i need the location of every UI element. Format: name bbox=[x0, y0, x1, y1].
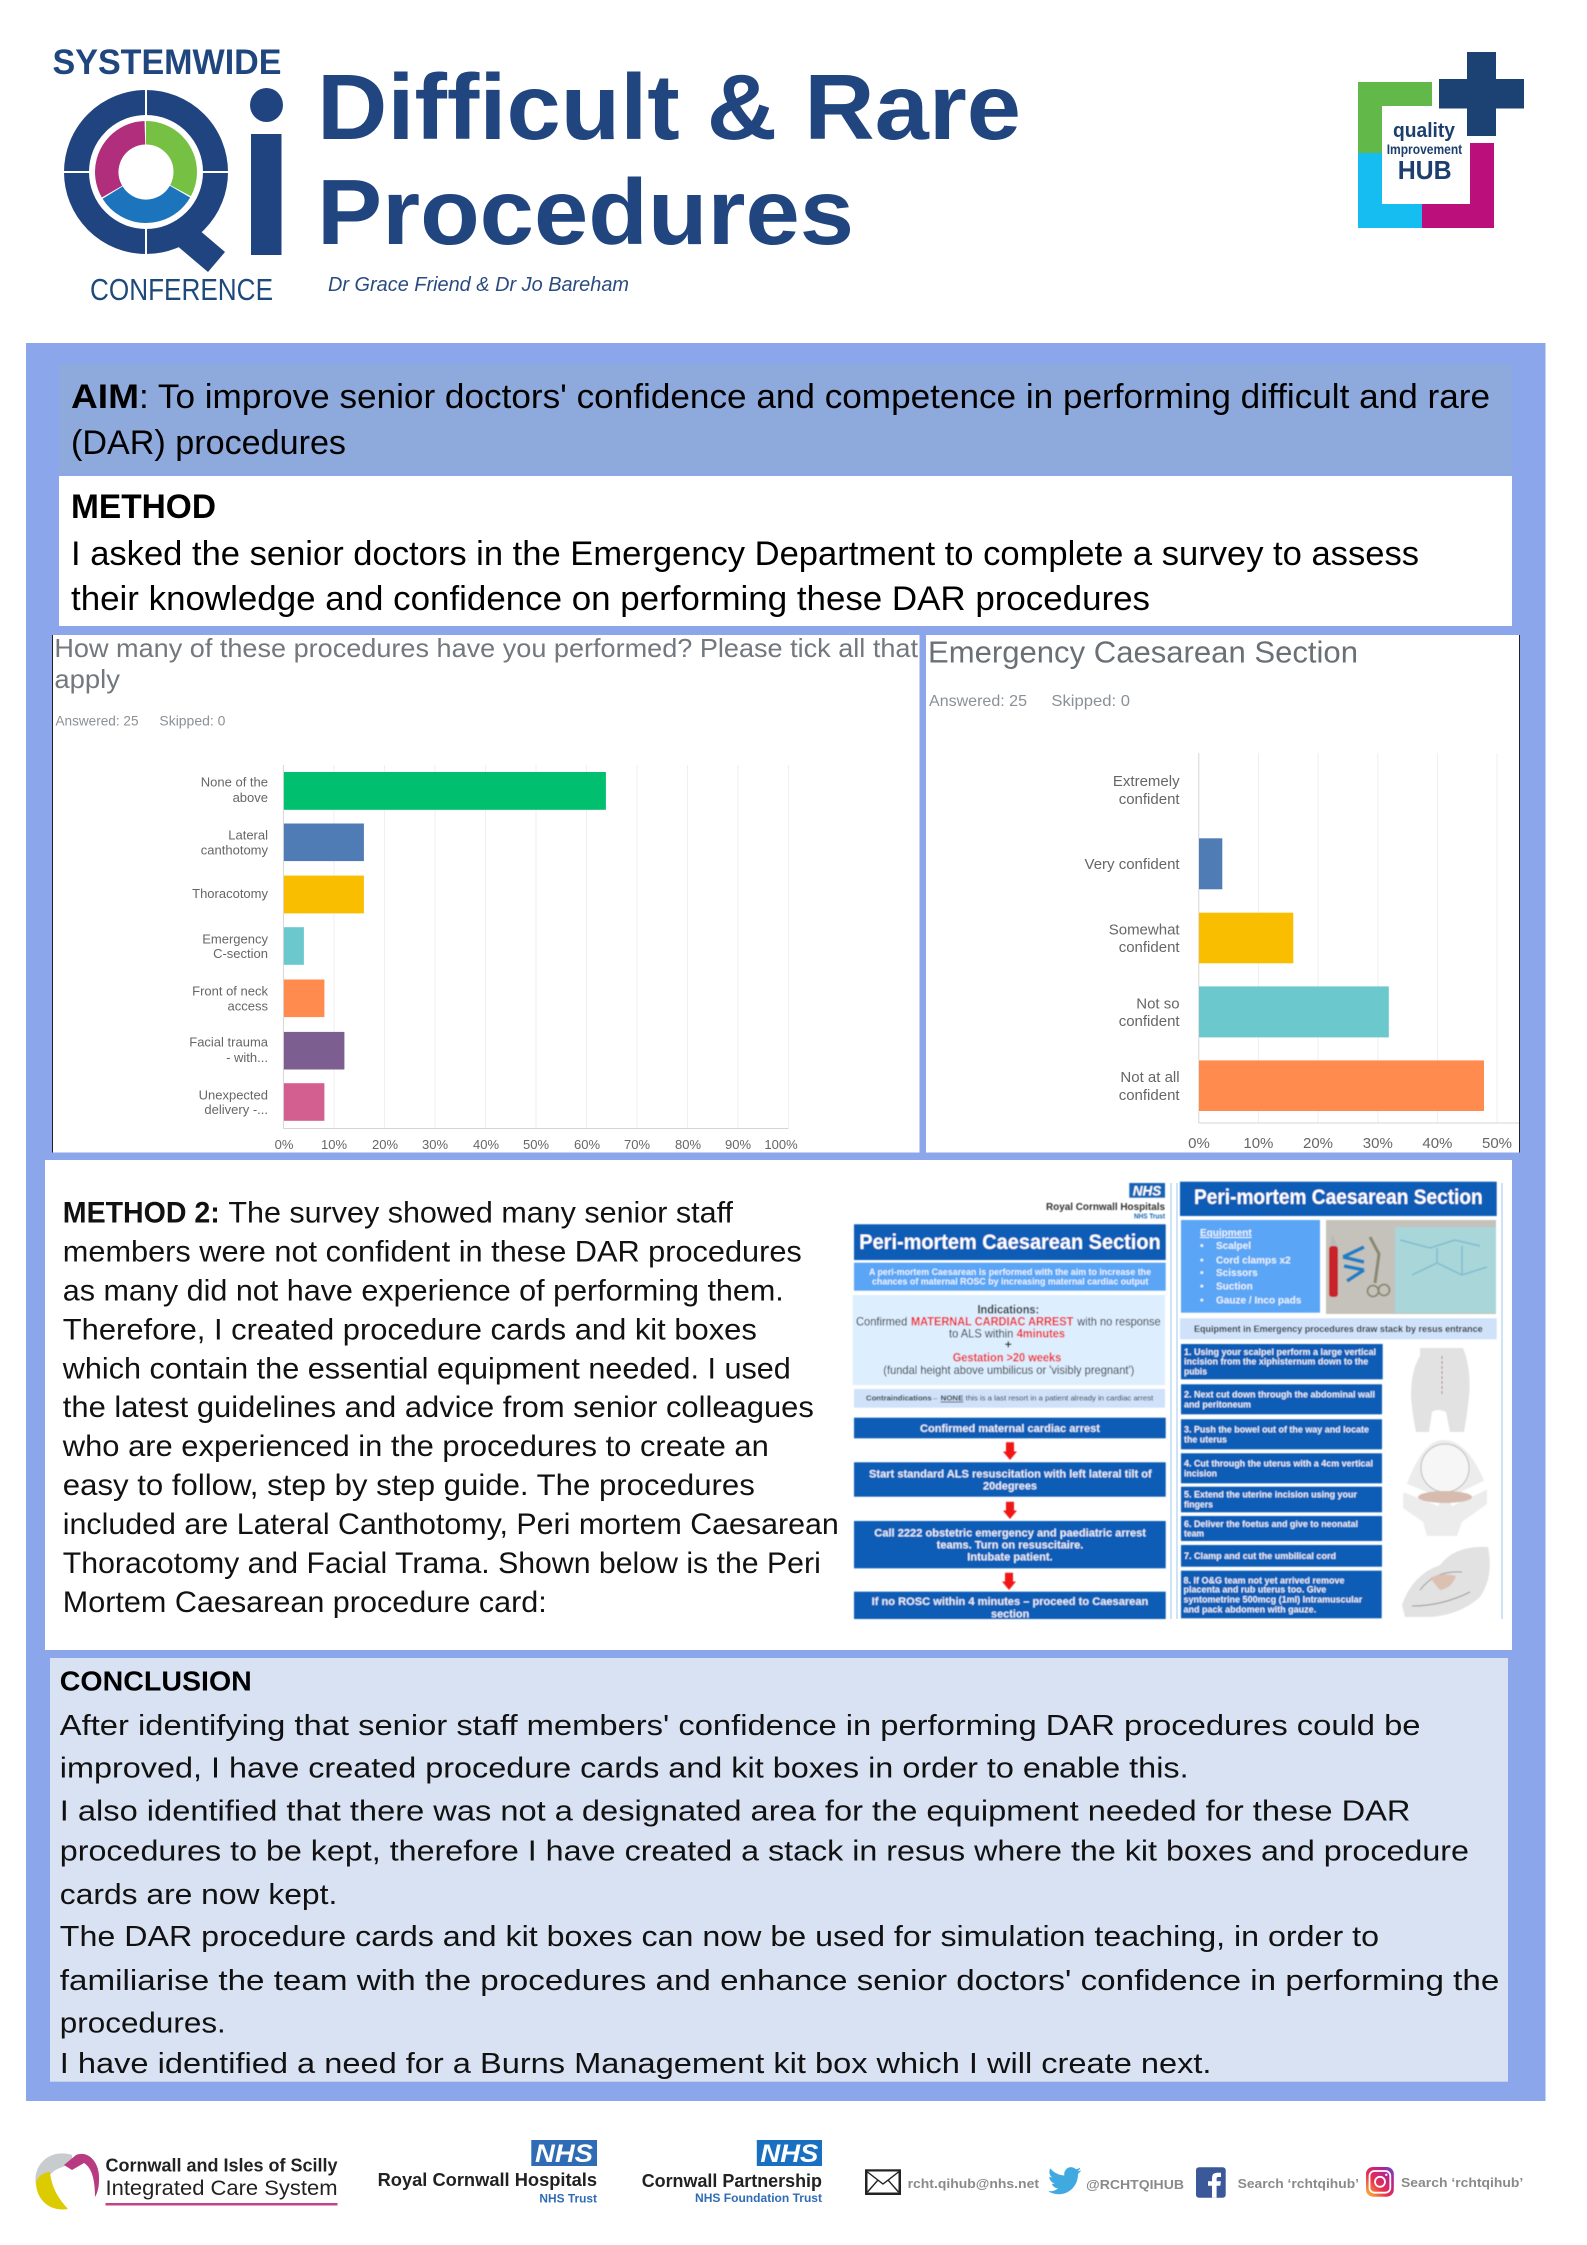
logo: Systemwide QI Conference bbox=[52, 43, 283, 307]
flow step 2: Start standard ALS resuscitation with left lateral tilt of bbox=[869, 1468, 1152, 1480]
card title bbox=[854, 1224, 1166, 1260]
indications box: Gestation >20 weeks bbox=[953, 1351, 1062, 1365]
indications box: + bbox=[1005, 1337, 1012, 1351]
contact: instagram bbox=[1366, 2167, 1523, 2197]
procedure card: front bbox=[853, 1183, 1166, 1620]
icon: instagram bbox=[1366, 2167, 1394, 2197]
logo: Cornwall and Isles of Scilly Integrated Care System bbox=[35, 2153, 338, 2209]
equipment list: • bbox=[1200, 1267, 1204, 1279]
icon: twitter bird bbox=[1048, 2167, 1081, 2194]
trust name bbox=[1046, 1201, 1166, 1221]
logo: quality improvement hub bbox=[1358, 52, 1524, 228]
method 2 text: Mortem Caesarean procedure card: bbox=[63, 1586, 547, 1619]
step 6 bbox=[1181, 1516, 1382, 1541]
card title bbox=[1180, 1182, 1497, 1216]
bar: emergency c-section bbox=[284, 927, 304, 965]
logo: Cornwall Partnership: NHS bbox=[760, 2140, 819, 2168]
category labels: canthotomy bbox=[201, 842, 268, 858]
category labels: Front of neck bbox=[192, 983, 268, 998]
logo: Royal Cornwall Hospitals: NHS bbox=[535, 2140, 593, 2168]
category labels: delivery -... bbox=[204, 1102, 268, 1117]
flow step 4 bbox=[854, 1592, 1166, 1620]
equipment list: • bbox=[1200, 1240, 1204, 1252]
method 2 text: included are Lateral Canthotomy, Peri mortem Caesarean bbox=[63, 1508, 839, 1541]
trust name: NHS Trust bbox=[1134, 1214, 1166, 1221]
method 2 text: the latest guidelines and advice from senior colleagues bbox=[63, 1391, 814, 1424]
step 1: pubis bbox=[1184, 1367, 1207, 1378]
category labels: C-section bbox=[213, 946, 268, 961]
bar chart: confidence bbox=[1085, 753, 1519, 1152]
flow step 3: Call 2222 obstetric emergency and paediatric arrest bbox=[874, 1528, 1146, 1540]
step 1: 1. Using your scalpel perform a large vertical bbox=[1184, 1347, 1376, 1358]
illustration: abdomen incision bbox=[1411, 1348, 1470, 1432]
method 2 text: METHOD 2: bbox=[63, 1197, 220, 1230]
step 4 bbox=[1181, 1453, 1382, 1483]
step 5: 5. Extend the uterine incision using your bbox=[1184, 1490, 1357, 1501]
percent axis labels: 90% bbox=[725, 1137, 751, 1152]
contact: facebook: Search ‘rchtqihub’ bbox=[1238, 2176, 1359, 2191]
chart title bbox=[54, 633, 919, 694]
method 2 text: members were not confident in these DAR procedures bbox=[63, 1236, 802, 1269]
title bbox=[317, 55, 1021, 264]
icon: heart bbox=[35, 2153, 99, 2209]
conclusion text: The DAR procedure cards and kit boxes can now be used for simulation teaching, in order to bbox=[60, 1921, 1379, 1953]
bar: somewhat confident bbox=[1199, 913, 1293, 963]
answered and skipped counts: Answered: 25 bbox=[929, 693, 1027, 710]
bar: thoracotomy bbox=[284, 876, 364, 913]
step 6: team bbox=[1184, 1528, 1204, 1539]
equipment list: Suction bbox=[1216, 1280, 1253, 1292]
step 4: incision bbox=[1184, 1468, 1217, 1479]
step 2: 2. Next cut down through the abdominal wall bbox=[1184, 1390, 1375, 1401]
percent axis labels: 10% bbox=[321, 1137, 347, 1152]
title: Difficult & Rare bbox=[317, 55, 1021, 159]
method text bbox=[71, 535, 1419, 618]
logo: Cornwall Partnership: NHS Foundation Trust bbox=[695, 2191, 822, 2205]
card intro: chances of maternal ROSC by increasing maternal cardiac output bbox=[872, 1276, 1148, 1286]
icon: envelope bbox=[865, 2169, 901, 2195]
percent axis labels: 40% bbox=[473, 1137, 499, 1152]
chart title: How many of these procedures have you performed? Please tick all that bbox=[54, 633, 919, 663]
logo: quality improvement hub: HUB bbox=[1398, 155, 1452, 185]
conclusion text: I have identified a need for a Burns Management kit box which I will create next. bbox=[60, 2048, 1211, 2080]
conclusion heading: CONCLUSION bbox=[60, 1666, 252, 1697]
category labels: confident bbox=[1119, 1087, 1180, 1104]
step 3: 3. Push the bowel out of the way and locate bbox=[1184, 1425, 1369, 1436]
procedure card: back bbox=[1180, 1182, 1497, 1618]
chart title: Emergency Caesarean Section bbox=[928, 635, 1358, 670]
bar: facial trauma bbox=[284, 1032, 344, 1070]
icon: letter i bbox=[250, 88, 283, 255]
step 4: 4. Cut through the uterus with a 4cm vertical bbox=[1184, 1459, 1373, 1470]
answered and skipped counts bbox=[929, 693, 1130, 710]
method 2 text bbox=[62, 1197, 839, 1619]
bar: front of neck access bbox=[284, 980, 324, 1017]
conclusion text: cards are now kept. bbox=[60, 1879, 337, 1911]
category labels: access bbox=[228, 998, 268, 1014]
step 8: syntometrine 500mcg (1ml) Intramuscular bbox=[1184, 1594, 1362, 1605]
logo: quality improvement hub: Improvement bbox=[1387, 142, 1463, 157]
equipment list: • bbox=[1200, 1294, 1204, 1306]
percent axis labels: 40% bbox=[1422, 1135, 1452, 1152]
flow step 4: section bbox=[991, 1608, 1030, 1620]
step 2: and peritoneum bbox=[1184, 1399, 1251, 1410]
step 8: 8. If O&G team not yet arrived remove bbox=[1184, 1576, 1344, 1587]
method 2 text: who are experienced in the procedures to create an bbox=[62, 1430, 769, 1463]
flow step 1 bbox=[854, 1418, 1166, 1438]
bar: none of the above bbox=[284, 772, 606, 810]
category labels: Unexpected bbox=[199, 1087, 268, 1102]
conclusion text: familiarise the team with the procedures and enhance senior doctors' confidence in performing the bbox=[60, 1965, 1499, 1997]
logo text: systemwide: SYSTEMWIDE bbox=[52, 43, 282, 82]
panel: method 2 bbox=[45, 1160, 1512, 1650]
flow step 3: Intubate patient. bbox=[967, 1552, 1053, 1564]
flow step 1: Confirmed maternal cardiac arrest bbox=[920, 1423, 1100, 1435]
bar: unexpected delivery bbox=[284, 1083, 324, 1121]
answered and skipped counts bbox=[56, 713, 225, 728]
logo: Cornwall Partnership bbox=[642, 2140, 822, 2205]
indications box: Confirmed bbox=[856, 1315, 907, 1329]
category labels: Not so bbox=[1136, 995, 1180, 1012]
aim text: (DAR) procedures bbox=[71, 424, 346, 462]
indications box: to ALS within bbox=[949, 1326, 1013, 1340]
logo: Royal Cornwall Hospitals bbox=[378, 2140, 597, 2206]
percent axis labels: 0% bbox=[275, 1137, 294, 1152]
panel: method bbox=[59, 476, 1512, 626]
category labels: above bbox=[233, 790, 268, 805]
category labels: - with... bbox=[226, 1050, 268, 1065]
photo: equipment kit bbox=[1326, 1220, 1496, 1314]
panel: conclusion bbox=[50, 1658, 1508, 2082]
aim text: : To improve senior doctors' confidence and competence in performing difficult and rare bbox=[139, 378, 1490, 416]
percent axis labels bbox=[275, 1137, 798, 1152]
icon: facebook bbox=[1196, 2167, 1226, 2198]
location banner: Equipment in Emergency procedures draw stack by resus entrance bbox=[1194, 1324, 1483, 1335]
icon: NHS logo small: NHS bbox=[1133, 1184, 1161, 1198]
logo: Cornwall Partnership: Cornwall Partnership bbox=[642, 2170, 822, 2191]
answered and skipped counts: Skipped: 0 bbox=[1051, 693, 1130, 710]
percent axis labels: 50% bbox=[1482, 1135, 1512, 1152]
category labels: Extremely bbox=[1113, 773, 1180, 790]
logo: Cornwall and Isles of Scilly Integrated Care System: Integrated Care System bbox=[106, 2177, 338, 2200]
conclusion text: I also identified that there was not a designated area for the equipment needed for these DAR bbox=[60, 1796, 1410, 1828]
contact: instagram: Search ‘rchtqihub’ bbox=[1401, 2175, 1523, 2190]
method text: their knowledge and confidence on performing these DAR procedures bbox=[71, 580, 1150, 618]
equipment list: • bbox=[1200, 1254, 1204, 1266]
chart title: apply bbox=[54, 664, 120, 694]
category labels bbox=[1085, 773, 1180, 1104]
logo: Royal Cornwall Hospitals: Royal Cornwall Hospitals bbox=[378, 2169, 597, 2190]
percent axis labels: 80% bbox=[675, 1137, 701, 1152]
category labels: confident bbox=[1119, 791, 1180, 808]
conclusion text: improved, I have created procedure cards and kit boxes in order to enable this. bbox=[60, 1752, 1189, 1784]
contact: twitter bbox=[1048, 2167, 1184, 2194]
percent axis labels: 20% bbox=[372, 1137, 398, 1152]
indications box: Indications: bbox=[978, 1302, 1039, 1316]
category labels: Very confident bbox=[1085, 856, 1180, 873]
percent axis labels: 70% bbox=[624, 1137, 650, 1152]
category labels: Not at all bbox=[1120, 1069, 1180, 1086]
equipment list: Scissors bbox=[1216, 1267, 1258, 1279]
contact: facebook bbox=[1196, 2167, 1359, 2198]
step 1 bbox=[1181, 1344, 1383, 1379]
conclusion text bbox=[60, 1710, 1499, 2080]
step 8: placenta and rub uterus too. Give bbox=[1184, 1585, 1326, 1596]
step 2 bbox=[1181, 1384, 1382, 1414]
card intro bbox=[854, 1263, 1166, 1291]
step 8 bbox=[1181, 1571, 1382, 1618]
method 2 text: Thoracotomy and Facial Trama. Shown below is the Peri bbox=[63, 1547, 821, 1580]
percent axis labels: 60% bbox=[574, 1137, 600, 1152]
step 3 bbox=[1181, 1419, 1382, 1449]
indications box: 4minutes bbox=[1017, 1326, 1065, 1340]
category labels: Thoracotomy bbox=[192, 886, 268, 901]
flow step 3: teams. Turn on resuscitaire. bbox=[937, 1539, 1083, 1551]
category labels: Somewhat bbox=[1109, 921, 1180, 938]
logo text: conference: CONFERENCE bbox=[90, 272, 273, 307]
indications box: MATERNAL CARDIAC ARREST bbox=[911, 1315, 1074, 1329]
indications box: with no response bbox=[1076, 1315, 1161, 1329]
category labels: None of the bbox=[201, 775, 268, 790]
arrow bbox=[1003, 1502, 1017, 1519]
percent axis labels: 0% bbox=[1188, 1135, 1210, 1152]
conclusion text: After identifying that senior staff members' confidence in performing DAR procedures could be bbox=[60, 1710, 1420, 1742]
equipment list: Gauze / Inco pads bbox=[1216, 1294, 1301, 1306]
bar: not at all confident bbox=[1199, 1060, 1484, 1111]
panel: main blue background bbox=[26, 343, 1546, 2101]
flow step 2: 20degrees bbox=[983, 1480, 1037, 1492]
bar chart: procedures bbox=[189, 765, 798, 1152]
indications box: (fundal height above umbilicus or 'visibly pregnant') bbox=[883, 1363, 1134, 1377]
flow step 4: If no ROSC within 4 minutes – proceed to Caesarean bbox=[872, 1596, 1149, 1608]
percent axis labels: 30% bbox=[422, 1137, 448, 1152]
category labels: Emergency bbox=[202, 931, 268, 946]
method 2 text: easy to follow, step by step guide. The procedures bbox=[63, 1469, 755, 1502]
illustration: uterus surgery bbox=[1403, 1440, 1488, 1536]
card title: Peri-mortem Caesarean Section bbox=[859, 1231, 1161, 1254]
category labels: Facial trauma bbox=[189, 1035, 269, 1050]
method 2 text: as many did not have experience of performing them. bbox=[63, 1274, 784, 1308]
percent axis labels: 20% bbox=[1303, 1135, 1333, 1152]
title: Procedures bbox=[317, 160, 854, 264]
percent axis labels: 10% bbox=[1243, 1135, 1273, 1152]
answered and skipped counts: Answered: 25 bbox=[56, 713, 138, 728]
percent axis labels bbox=[1188, 1135, 1512, 1152]
aim heading: AIM bbox=[71, 378, 139, 416]
authors: Dr Grace Friend & Dr Jo Bareham bbox=[328, 273, 629, 296]
category labels bbox=[189, 775, 269, 1117]
method heading: METHOD bbox=[71, 488, 216, 526]
contraindications box bbox=[854, 1389, 1165, 1408]
icon: letter Q ring bbox=[62, 88, 230, 272]
method 2 text: which contain the essential equipment needed. I used bbox=[62, 1352, 791, 1385]
bar: not so confident bbox=[1199, 986, 1389, 1037]
contraindications box: Contraindications bbox=[866, 1394, 932, 1403]
contact: twitter: @RCHTQIHUB bbox=[1086, 2177, 1184, 2192]
contraindications box: this is a last resort in a patient already in cardiac arrest bbox=[966, 1394, 1154, 1403]
step list bbox=[1181, 1344, 1383, 1618]
logo: Royal Cornwall Hospitals: NHS Trust bbox=[539, 2192, 597, 2206]
category labels: Lateral bbox=[228, 827, 268, 842]
step 5 bbox=[1181, 1487, 1382, 1512]
card title: Peri-mortem Caesarean Section bbox=[1194, 1186, 1483, 1209]
equipment list: Equipment bbox=[1200, 1227, 1252, 1239]
indications box bbox=[853, 1295, 1165, 1385]
equipment list: Cord clamps x2 bbox=[1216, 1254, 1291, 1266]
equipment list bbox=[1181, 1220, 1320, 1313]
step 7 bbox=[1181, 1545, 1382, 1567]
aim text bbox=[71, 378, 1490, 462]
step 6: 6. Deliver the foetus and give to neonatal bbox=[1184, 1519, 1358, 1530]
method text: I asked the senior doctors in the Emergency Department to complete a survey to assess bbox=[71, 535, 1419, 573]
conclusion text: procedures to be kept, therefore I have created a stack in resus where the kit boxes and procedure bbox=[60, 1836, 1469, 1868]
illustration: lower uterine segment bbox=[1402, 1547, 1490, 1617]
answered and skipped counts: Skipped: 0 bbox=[159, 713, 225, 728]
bar: lateral canthotomy bbox=[284, 824, 364, 861]
logo: Cornwall and Isles of Scilly Integrated Care System: Cornwall and Isles of Scilly bbox=[106, 2155, 338, 2176]
arrow bbox=[1002, 1573, 1016, 1590]
method 2 text: Therefore, I created procedure cards and kit boxes bbox=[63, 1313, 757, 1346]
trust name: Royal Cornwall Hospitals bbox=[1046, 1201, 1165, 1213]
contraindications box: – bbox=[933, 1394, 938, 1403]
step 3: the uterus bbox=[1184, 1435, 1227, 1446]
step 7: 7. Clamp and cut the umbilical cord bbox=[1184, 1551, 1336, 1562]
card intro: A peri-mortem Caesarean is performed with the aim to increase the bbox=[869, 1267, 1151, 1277]
method 2 text: The survey showed many senior staff bbox=[228, 1197, 734, 1230]
conclusion text: procedures. bbox=[60, 2008, 226, 2040]
contraindications box: NONE bbox=[941, 1394, 963, 1403]
equipment list: Scalpel bbox=[1216, 1240, 1251, 1252]
panel: aim bbox=[59, 364, 1512, 474]
arrow bbox=[1003, 1442, 1017, 1460]
panel: chart emergency caesarean confidence bbox=[926, 635, 1520, 1152]
percent axis labels: 100% bbox=[764, 1137, 798, 1152]
contact: email bbox=[865, 2169, 1040, 2195]
flow step 3 bbox=[854, 1521, 1166, 1568]
logo: quality improvement hub: quality bbox=[1393, 120, 1456, 142]
equipment list: • bbox=[1200, 1280, 1204, 1292]
panel: chart procedures performed bbox=[52, 633, 920, 1152]
contact: email: rcht.qihub@nhs.net bbox=[908, 2176, 1040, 2191]
step 5: fingers bbox=[1184, 1499, 1213, 1510]
percent axis labels: 50% bbox=[523, 1137, 549, 1152]
bar: very confident bbox=[1199, 838, 1222, 889]
step 1: incision from the xiphisternum down to the bbox=[1184, 1357, 1368, 1368]
flow step 2 bbox=[854, 1462, 1166, 1497]
location banner bbox=[1180, 1318, 1497, 1339]
category labels: confident bbox=[1119, 939, 1180, 956]
percent axis labels: 30% bbox=[1363, 1135, 1393, 1152]
category labels: confident bbox=[1119, 1013, 1180, 1030]
step 8: and pack abdomen with gauze. bbox=[1184, 1604, 1316, 1615]
